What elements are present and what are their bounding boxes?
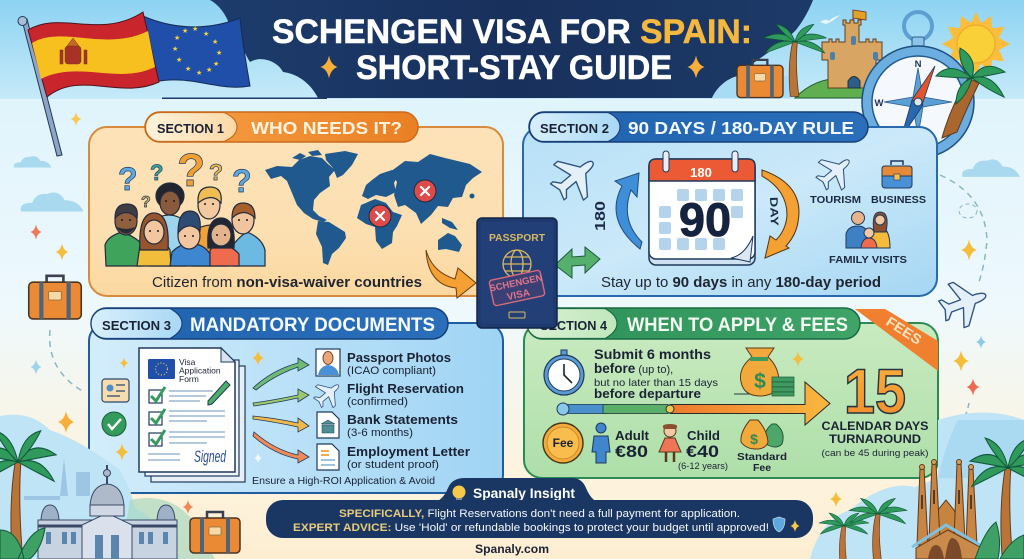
section 2 pill bbox=[529, 112, 868, 142]
insight box: EXPERT ADVICE: Use 'Hold' or refundable bookings to protect your budget until approved! bbox=[293, 522, 769, 534]
section 4 pill: SECTION 4 bbox=[540, 318, 608, 333]
document list: (or student proof) bbox=[347, 459, 439, 471]
document list: Employment Letter bbox=[347, 444, 470, 459]
flags: Spain and EU: ★ bbox=[176, 56, 182, 64]
blue arrow and 180 label bbox=[592, 173, 642, 249]
passport: VISA bbox=[506, 288, 531, 303]
standard fee: $ bbox=[750, 431, 758, 447]
child fee: €40 bbox=[686, 443, 719, 461]
compass: S bbox=[915, 136, 921, 147]
flags: Spain and EU: ★ bbox=[196, 69, 202, 77]
section 1 pill: SECTION 1 bbox=[157, 122, 224, 136]
flags: Spain and EU: ★ bbox=[203, 30, 209, 38]
scenery: castle, suitcase, palm bbox=[712, 10, 885, 98]
document list bbox=[347, 350, 470, 471]
header band bbox=[162, 0, 813, 99]
visa application form: Signed bbox=[194, 447, 226, 466]
flags: Spain and EU: ★ bbox=[206, 66, 212, 74]
stopwatch bbox=[544, 350, 584, 395]
flags: Spain and EU: ★ bbox=[213, 60, 219, 68]
group of people with question marks: ? bbox=[177, 144, 205, 196]
purpose icons: tourism, business, family: TOURISM bbox=[810, 194, 861, 206]
section 1 pill bbox=[145, 112, 418, 142]
standard fee: Fee bbox=[753, 462, 771, 474]
flags: Spain and EU: ★ bbox=[172, 45, 178, 53]
website: Spanaly.com bbox=[475, 542, 549, 556]
insight box bbox=[266, 500, 813, 538]
panel: section 1 who needs it bbox=[89, 112, 503, 296]
sparkle: title left bbox=[320, 56, 338, 78]
document list: (ICAO compliant) bbox=[347, 365, 436, 377]
child fee bbox=[659, 424, 728, 471]
scene: bottom left palace, palm, suitcase bbox=[0, 415, 240, 559]
fees corner ribbon: FEES bbox=[883, 313, 925, 348]
child fee: (6-12 years) bbox=[678, 461, 728, 471]
flags: Spain and EU: ★ bbox=[185, 65, 191, 73]
passport: SCHENGEN bbox=[489, 273, 544, 295]
fee badge bbox=[543, 423, 583, 463]
visa application form: Visa bbox=[179, 357, 196, 367]
section 2 caption: Stay up to 90 days in any 180-day period bbox=[601, 274, 881, 291]
apply timing text: before departure bbox=[594, 386, 701, 401]
section 3 pill: SECTION 3 bbox=[102, 318, 171, 333]
arrows to documents bbox=[253, 358, 309, 463]
connector arrow: green double bbox=[555, 247, 600, 278]
purpose icons: tourism, business, family: BUSINESS bbox=[871, 194, 926, 206]
group of people with question marks bbox=[105, 144, 265, 266]
timeline arrow bbox=[557, 382, 830, 425]
15 calendar days: CALENDAR DAYS bbox=[822, 419, 928, 433]
group of people with question marks: ? bbox=[232, 163, 252, 199]
panel: section 3 mandatory documents bbox=[58, 308, 503, 493]
purpose icons: tourism, business, family bbox=[810, 147, 926, 266]
document list: (confirmed) bbox=[347, 396, 408, 408]
section 4 pill: WHEN TO APPLY & FEES bbox=[627, 315, 848, 336]
money bag large bbox=[734, 348, 804, 396]
passport: PASSPORT bbox=[489, 232, 546, 244]
title: SCHENGEN VISA FOR SPAIN: bbox=[272, 13, 752, 51]
world map with X markers bbox=[265, 150, 482, 265]
fee badge: Fee bbox=[553, 436, 574, 450]
orange arrow and day label: DAY bbox=[767, 197, 780, 227]
visa application form: Application bbox=[179, 366, 221, 376]
15 calendar days bbox=[822, 357, 928, 459]
decor: left sparkles and clouds bbox=[14, 112, 84, 392]
sun bbox=[942, 12, 1010, 75]
15 calendar days: 15 bbox=[844, 357, 906, 427]
insight tab: Spanaly Insight bbox=[473, 485, 575, 501]
title: SHORT-STAY GUIDE bbox=[356, 49, 672, 87]
decor: right side bbox=[934, 159, 1020, 436]
flags: Spain and EU: ★ bbox=[216, 49, 222, 57]
compass: W bbox=[875, 98, 884, 109]
visa application form bbox=[139, 348, 245, 482]
panel: section 4 when to apply and fees bbox=[524, 308, 938, 478]
group of people with question marks: ? bbox=[118, 161, 138, 197]
sparkle: title right bbox=[687, 56, 705, 78]
suitcase left bbox=[29, 276, 81, 319]
calendar 90 days bbox=[649, 151, 755, 265]
document icons bbox=[309, 349, 347, 470]
standard fee bbox=[737, 420, 787, 474]
money bag large: $ bbox=[754, 370, 766, 393]
section 1 pill: WHO NEEDS IT? bbox=[251, 118, 402, 138]
visa application form: Form bbox=[179, 374, 199, 384]
section 3 footer note: Ensure a High-ROI Application & Avoid bbox=[252, 476, 435, 487]
section 3 pill bbox=[91, 308, 448, 339]
flags: Spain and EU: ★ bbox=[174, 34, 180, 42]
compass: N bbox=[915, 59, 922, 70]
flags: Spain and EU: ★ bbox=[182, 27, 188, 35]
section 4 pill bbox=[527, 308, 860, 339]
apply timing text: Submit 6 months bbox=[594, 347, 711, 362]
15 calendar days: TURNAROUND bbox=[829, 432, 921, 446]
left icons: id card and check bbox=[58, 358, 129, 460]
group of people with question marks: ? bbox=[209, 159, 223, 185]
adult fee: Adult bbox=[615, 428, 650, 443]
standard fee: Standard bbox=[737, 451, 787, 463]
fees corner ribbon bbox=[855, 309, 938, 371]
title bbox=[272, 13, 752, 87]
apply timing text bbox=[594, 347, 718, 401]
palm at compass bbox=[936, 48, 1005, 138]
adult fee bbox=[592, 423, 650, 463]
child fee: Child bbox=[687, 428, 720, 443]
section 2 pill: 90 DAYS / 180-DAY RULE bbox=[628, 118, 854, 138]
calendar 90 days: 180 bbox=[690, 165, 712, 180]
apply timing text: but no later than 15 days bbox=[594, 377, 718, 389]
blue arrow and 180 label: 180 bbox=[592, 201, 609, 231]
plane icon bbox=[542, 144, 608, 210]
document list: (3-6 months) bbox=[347, 427, 413, 439]
insight tab bbox=[428, 478, 604, 504]
group of people with question marks: ? bbox=[150, 160, 163, 185]
document list: Passport Photos bbox=[347, 350, 451, 365]
panel: spanaly insight bbox=[266, 478, 813, 556]
flags: Spain and EU: ★ bbox=[212, 38, 218, 46]
scene: bottom right basilica and palms bbox=[810, 412, 1024, 559]
flags: Spain and EU bbox=[18, 12, 250, 156]
panel: section 2 90/180 rule bbox=[523, 112, 937, 296]
flags: Spain and EU: ★ bbox=[192, 25, 198, 33]
orange arrow and day label bbox=[762, 170, 799, 258]
insight box: SPECIFICALLY, Flight Reservations don't need a full payment for application. bbox=[339, 508, 740, 520]
calendar 90 days: 90 bbox=[679, 193, 731, 246]
adult fee: €80 bbox=[615, 443, 648, 461]
document list: Bank Statements bbox=[347, 412, 458, 427]
purpose icons: tourism, business, family: FAMILY VISITS bbox=[829, 254, 907, 266]
section 2 pill: SECTION 2 bbox=[540, 122, 609, 136]
section 3 pill: MANDATORY DOCUMENTS bbox=[190, 315, 435, 336]
passport bbox=[477, 218, 557, 328]
15 calendar days: (can be 45 during peak) bbox=[822, 448, 928, 459]
compass bbox=[862, 12, 974, 158]
group of people with question marks: ? bbox=[141, 194, 151, 211]
document list: Flight Reservation bbox=[347, 381, 464, 396]
apply timing text: before (up to), bbox=[594, 361, 673, 376]
section 1 caption: Citizen from non-visa-waiver countries bbox=[152, 274, 422, 291]
connector arrow: orange to passport bbox=[426, 250, 476, 298]
